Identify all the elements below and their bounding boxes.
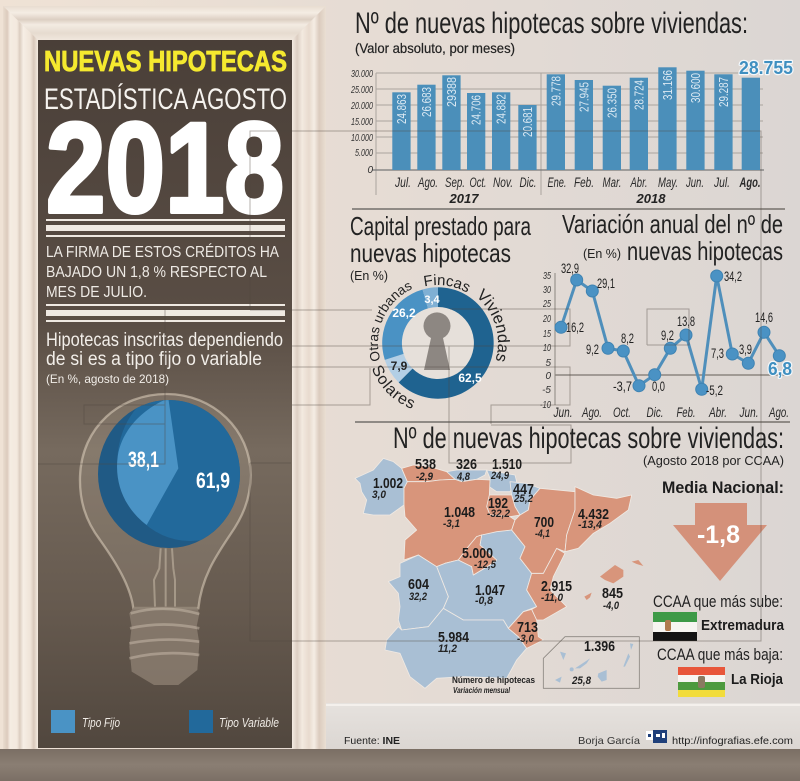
map labels: 700: [534, 514, 554, 531]
map legend: [452, 675, 535, 695]
y axis labels: 5.000: [355, 148, 373, 159]
title: capital prestado: [350, 211, 531, 268]
icon: flag of Extremadura: [653, 612, 697, 641]
map labels: 1.048: [444, 504, 475, 521]
title: capital prestado: nuevas hipotecas: [350, 238, 511, 268]
y axis labels: 30.000: [351, 69, 373, 80]
map labels: 5.000: [462, 545, 493, 562]
y axis: -5: [542, 385, 551, 396]
source credit: Fuente: INE: [344, 735, 400, 747]
region: Extremadura: [388, 555, 448, 630]
bar value labels: 27.945: [576, 82, 591, 112]
map labels: -0,8: [475, 595, 494, 607]
legend: tipo fijo: Tipo Fijo: [82, 715, 120, 730]
y axis labels: [350, 69, 373, 176]
map labels: 1.396: [584, 638, 615, 655]
month labels: May.: [658, 175, 678, 190]
light bulb pie chart: [80, 382, 263, 685]
map labels: -11,0: [541, 592, 564, 604]
bulb section heading: (En %, agosto de 2018): [46, 372, 169, 386]
bar chart: monthly mortgages: [350, 58, 793, 206]
bar value labels: 20.681: [520, 107, 535, 137]
y axis: 5: [545, 358, 551, 369]
rule group top: [46, 219, 285, 237]
series line: [561, 276, 779, 389]
month labels: Abr.: [708, 405, 727, 420]
map labels: 192: [488, 495, 508, 512]
map labels: 24,9: [490, 470, 510, 482]
point values: 16,2: [566, 320, 584, 335]
point values: 14,6: [755, 310, 773, 325]
point values: 9,2: [586, 342, 599, 357]
y axis labels: 10.000: [351, 133, 373, 144]
curved category labels: Fincas: [424, 274, 470, 292]
map labels: -13,4: [578, 519, 602, 531]
region: Aragón: [512, 488, 575, 573]
region: Castilla y León: [404, 479, 515, 567]
month labels: Ene.: [548, 175, 566, 190]
baseboard: [326, 703, 800, 750]
pie: variable share: [98, 400, 240, 548]
map labels: 326: [456, 456, 477, 473]
map labels: -3,1: [443, 518, 460, 530]
bar value labels: 29.287: [716, 77, 731, 107]
bar value labels: 24.863: [394, 94, 409, 124]
intro text block: [46, 242, 279, 301]
point values: 8,2: [621, 331, 634, 346]
map labels: 4,8: [456, 471, 471, 483]
region: Andalucía: [385, 608, 527, 688]
subtitle: en %: (En %): [350, 268, 388, 283]
point values: 13,8: [677, 314, 695, 329]
donut values: 3,4: [424, 294, 441, 306]
y axis: [540, 271, 555, 411]
region: La Rioja: [487, 495, 520, 517]
map labels: -2,9: [416, 471, 434, 483]
map labels: 5.984: [438, 629, 470, 646]
month labels: Mar.: [602, 175, 622, 190]
region: Murcia: [508, 609, 543, 648]
month labels: Dic.: [646, 405, 664, 420]
month labels: Feb.: [574, 175, 594, 190]
month labels: Ago.: [739, 175, 760, 190]
map labels: 447: [513, 481, 534, 498]
month labels: Feb.: [676, 405, 696, 420]
donut values: 26,2: [392, 306, 416, 320]
big year 2018: 2018: [46, 97, 284, 240]
bulb section heading: de si es a tipo fijo o variable: [46, 349, 262, 370]
slice: viviendas: [399, 287, 494, 399]
slice: fincas: [423, 287, 438, 308]
map labels: 3,0: [372, 489, 387, 501]
region: País Vasco: [487, 470, 517, 492]
month labels: Dic.: [520, 175, 536, 190]
label: Extremadura: Extremadura: [701, 617, 785, 634]
pie: fixed share: [117, 398, 178, 525]
map labels: -4,0: [603, 600, 620, 612]
icon: keyhole: [423, 312, 450, 370]
y axis: 20: [542, 314, 551, 325]
highlight value 6,8: 6,8: [768, 359, 792, 379]
month labels: Oct.: [613, 405, 631, 420]
month labels: Jun.: [685, 175, 704, 190]
curved category labels: Solares: [372, 366, 414, 408]
map legend: Número de hipotecas: [452, 675, 535, 686]
month labels: Ago.: [417, 175, 438, 190]
month labels: Oct.: [470, 175, 486, 190]
y axis: 35: [543, 271, 551, 282]
callout: media nacional heading: Media Nacional:: [662, 478, 784, 497]
bar value labels: 30.600: [688, 73, 703, 103]
month labels: [553, 405, 789, 420]
legend: tipo fijo: [51, 710, 120, 733]
icon: EFE logo: [646, 730, 667, 743]
title: capital prestado: Capital prestado para: [350, 211, 531, 241]
donut values: [391, 294, 482, 385]
donut values: 62,5: [458, 371, 482, 385]
curved category labels: [370, 274, 510, 408]
point values: -5,2: [706, 383, 723, 398]
y axis labels: 0: [367, 165, 373, 176]
map labels: 32,2: [409, 591, 427, 603]
bar value labels: 26.683: [419, 87, 434, 117]
month labels: Nov.: [493, 175, 513, 190]
title: variación anual: [562, 209, 783, 266]
region: Cantabria: [447, 470, 487, 482]
region: Cataluña: [565, 487, 632, 552]
label: La Rioja: La Rioja: [731, 671, 784, 688]
bulb section heading: Hipotecas inscritas dependiendo: [46, 330, 283, 351]
section rule top: [352, 208, 785, 210]
line chart: annual variation: [540, 261, 792, 420]
point values: 3,9: [739, 342, 752, 357]
map labels: -12,5: [474, 559, 497, 571]
month labels: Jun.: [553, 405, 572, 420]
bulb section heading: [46, 330, 283, 386]
pie value: tipo fijo: 38,1: [128, 447, 159, 472]
month labels: [394, 175, 760, 190]
section rule middle: [355, 421, 790, 423]
bar value labels: 26.350: [604, 88, 619, 118]
intro text block: LA FIRMA DE ESTOS CRÉDITOS HA: [46, 242, 279, 261]
curved category labels: Otras urbanas: [370, 283, 412, 361]
slice: solares: [385, 354, 412, 382]
map labels: 4.432: [578, 506, 609, 523]
map of Spain: [355, 458, 643, 688]
bar value labels: 31.166: [660, 70, 675, 100]
arrow: national average down: [673, 503, 767, 581]
region: Castilla-La Mancha: [437, 530, 537, 628]
point values: 7,3: [711, 346, 724, 361]
point values: 34,2: [724, 269, 742, 284]
value -1,8: -1,8: [697, 521, 740, 549]
series points: [555, 270, 785, 395]
region: Canarias inset: [543, 637, 639, 688]
highlight value 28.755: 28.755: [739, 58, 793, 78]
bar value labels: 29388: [444, 77, 459, 107]
point values: 32,9: [561, 261, 579, 276]
point values: -3,7: [613, 379, 632, 394]
floor: [0, 749, 800, 781]
panel subheading: estadística agosto: ESTADÍSTICA AGOSTO: [44, 83, 287, 116]
map labels: 538: [415, 456, 436, 473]
map labels: 845: [602, 585, 623, 602]
bar value labels: 29.778: [548, 76, 563, 106]
bar value labels: 24.706: [469, 95, 484, 125]
legend: tipo variable: [189, 710, 279, 733]
icon: bulb glass: [80, 394, 251, 608]
month labels: Jun.: [739, 405, 758, 420]
map labels: 604: [408, 576, 430, 593]
month labels: Sep.: [445, 175, 465, 190]
bar value labels: 28.724: [631, 80, 646, 110]
map labels: 713: [517, 619, 538, 636]
y axis labels: 25.000: [350, 85, 373, 96]
point values: 9,2: [661, 328, 674, 343]
y axis: 25: [542, 299, 551, 310]
y axis: 10: [543, 343, 551, 354]
month labels: Jul.: [713, 175, 730, 190]
map labels: -3,0: [517, 633, 535, 645]
region: Madrid: [458, 535, 497, 575]
month labels: Jul.: [394, 175, 411, 190]
bar value labels: 24.882: [494, 94, 509, 124]
legend: tipo variable: Tipo Variable: [219, 715, 279, 730]
icon: filament stem: [154, 548, 175, 607]
slice: otras urbanas: [382, 290, 428, 360]
y axis: 0: [545, 371, 551, 382]
map labels: 11,2: [438, 643, 457, 655]
month labels: Abr.: [630, 175, 648, 190]
region: Baleares: [584, 560, 643, 600]
month labels: Ago.: [581, 405, 602, 420]
subtitle: en % line chart: (En %): [583, 246, 621, 261]
map labels: -4,1: [535, 528, 550, 540]
bars: [392, 67, 760, 170]
curved category labels: Viviendas: [479, 288, 510, 362]
subtitle: valor absoluto: (Valor absoluto, por meses): [355, 40, 515, 56]
bar value labels: [394, 70, 731, 137]
region: Asturias: [402, 465, 457, 482]
pie value: tipo variable: 61,9: [196, 468, 230, 493]
donut chart: capital by type: [370, 274, 510, 408]
y axis: -10: [540, 400, 551, 411]
door panel: [38, 40, 292, 748]
y axis: 15: [543, 329, 551, 340]
region: Comunidad Valenciana: [527, 548, 567, 620]
map labels: -32,2: [487, 508, 510, 520]
y axis: 30: [543, 285, 551, 296]
point values: 0,0: [652, 379, 665, 394]
map labels: 1.510: [492, 456, 522, 473]
door frame: [3, 6, 326, 750]
map labels: 25,8: [571, 675, 592, 687]
year 2017: 2017: [449, 191, 479, 206]
y axis labels: 15.000: [351, 117, 373, 128]
map labels: 1.002: [373, 475, 403, 492]
intro text block: MES DE JULIO.: [46, 284, 147, 301]
panel heading: nuevas hipotecas: NUEVAS HIPOTECAS: [44, 46, 287, 78]
map labels: 25,2: [513, 493, 533, 505]
map labels: [372, 456, 623, 687]
region: Galicia: [355, 458, 407, 515]
map legend: Variación mensual: [453, 686, 511, 695]
region: Navarra: [510, 482, 540, 515]
map labels: 2.915: [541, 578, 572, 595]
map labels: 1.047: [475, 582, 505, 599]
icon: flag of La Rioja: [678, 667, 725, 697]
point values: 29,1: [597, 276, 615, 291]
y axis labels: 20.000: [350, 101, 373, 112]
donut values: 7,9: [391, 359, 408, 373]
month labels: Ago.: [768, 405, 789, 420]
source url: http://infografias.efe.com: [672, 735, 793, 747]
year 2018: 2018: [636, 191, 666, 206]
author credit: Borja García: [578, 735, 640, 747]
point values: [561, 261, 773, 398]
icon: bulb screw base: [129, 607, 199, 685]
subtitle: map section: (Agosto 2018 por CCAA): [643, 454, 784, 468]
intro text block: BAJADO UN 1,8 % RESPECTO AL: [46, 264, 267, 281]
rule group bottom: [46, 304, 285, 322]
